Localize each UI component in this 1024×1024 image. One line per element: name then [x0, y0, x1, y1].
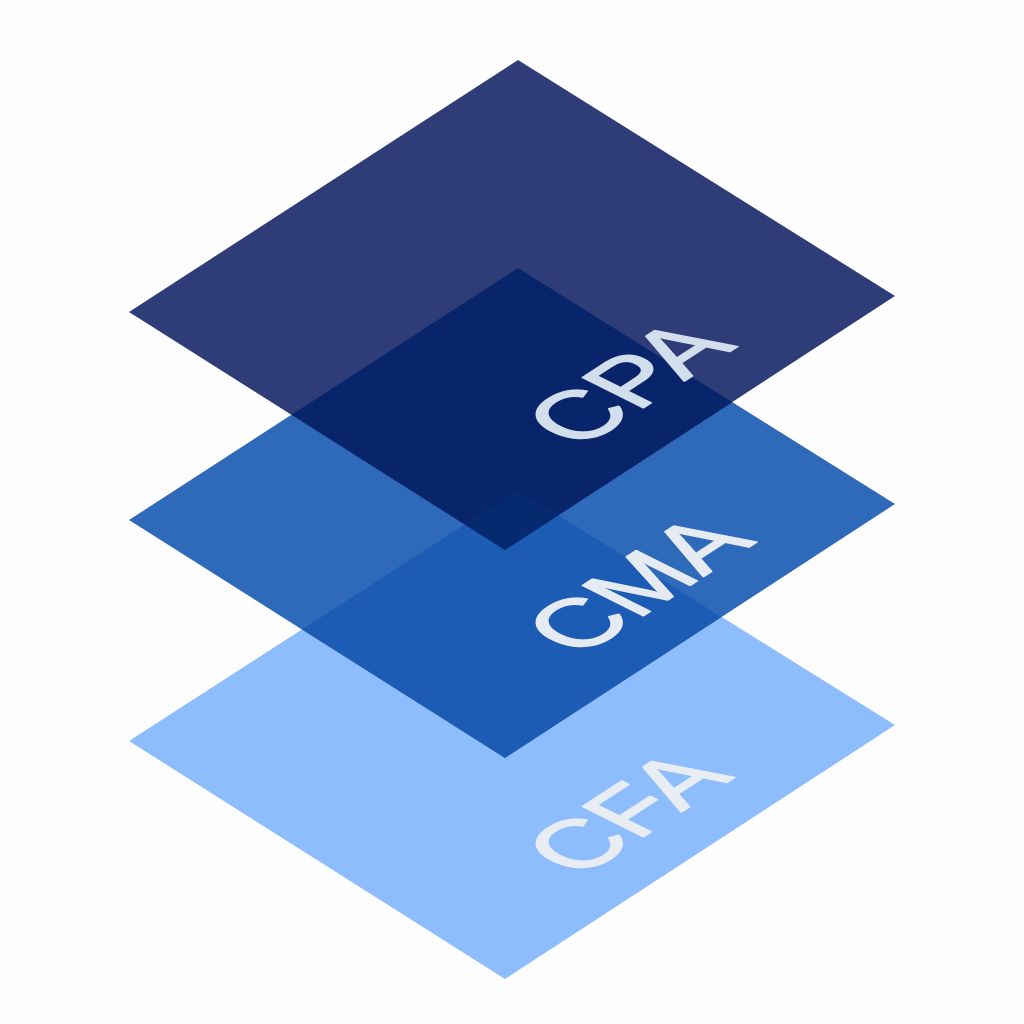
layer: CMA [129, 268, 895, 758]
layer: CFA: CFA [499, 737, 754, 888]
layer: CPA [129, 60, 895, 550]
layer: CMA: CMA [499, 502, 776, 667]
layer: CPA: CPA [499, 306, 757, 459]
